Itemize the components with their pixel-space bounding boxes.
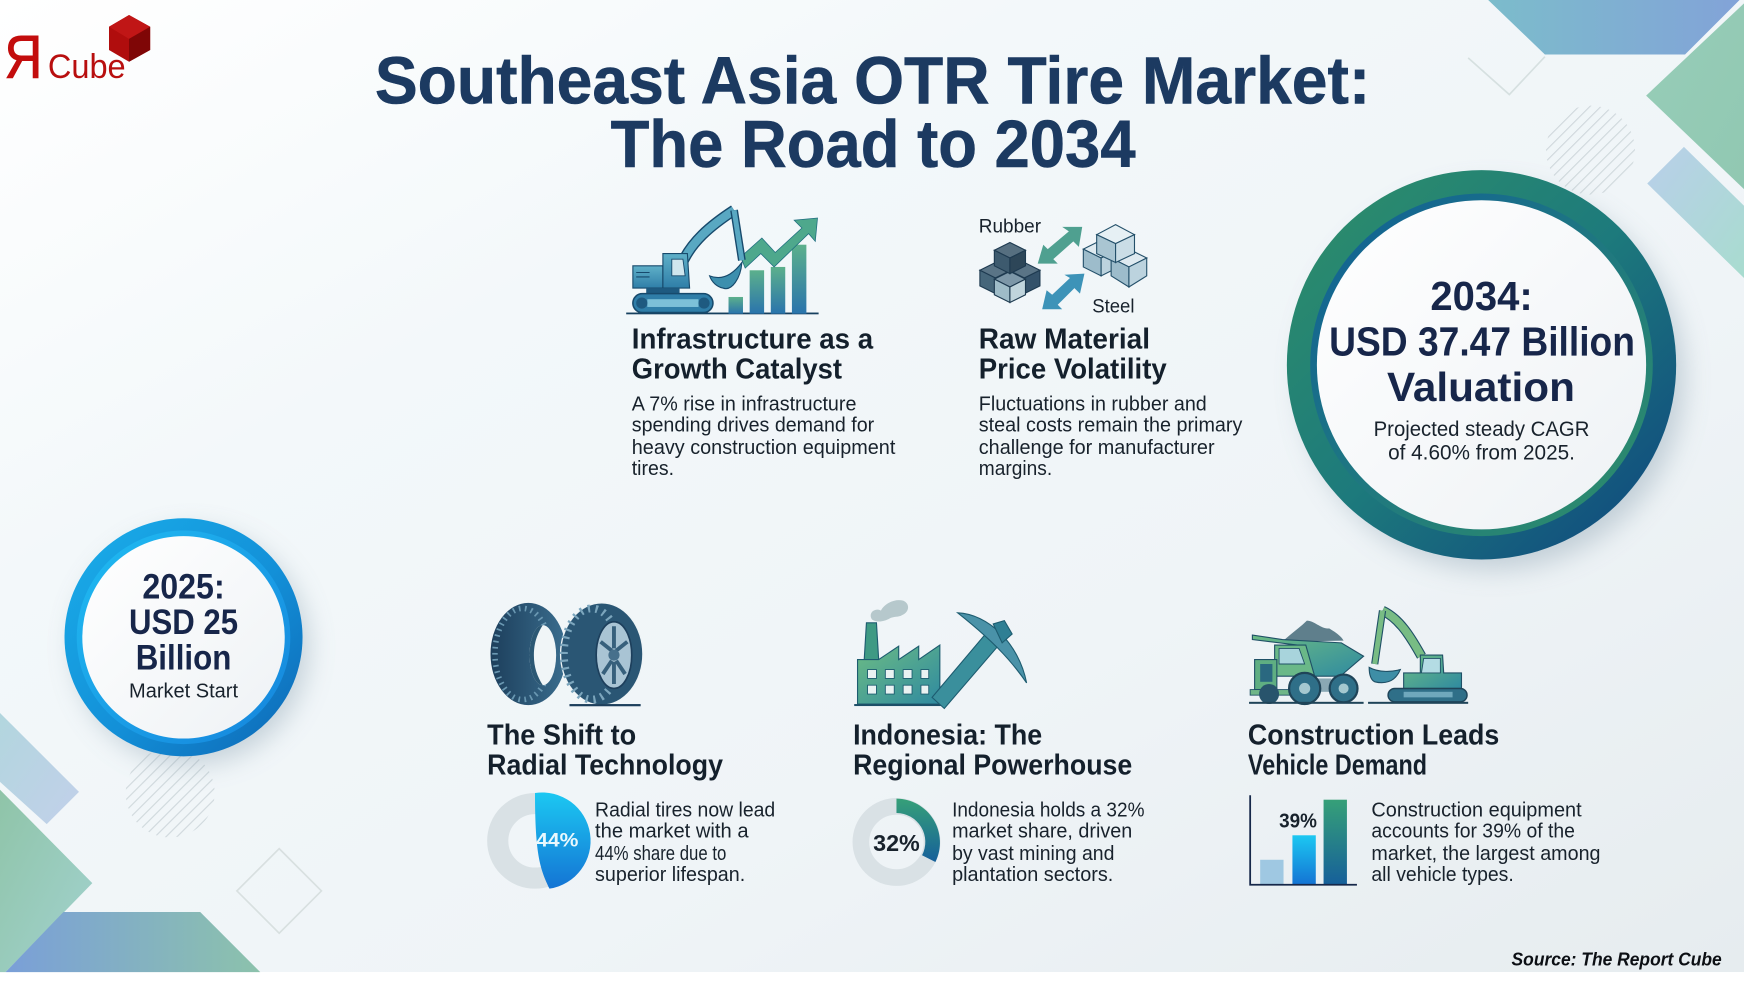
callout: 2034 valuation [1287,170,1684,569]
logo: Cube [48,48,126,86]
body text [952,798,1144,886]
callout: 2034 valuation: Projected steady CAGR [1374,416,1589,441]
title [375,44,1370,182]
body text: superior lifespan. [595,863,745,886]
title: Southeast Asia OTR Tire Market: [375,44,1370,118]
panel: infrastructure [626,210,896,480]
heading: Construction Leads [1248,720,1499,752]
callout: 2025 market start: USD 25 [129,602,238,642]
heading [632,324,874,386]
heading [853,720,1132,782]
icon: excavator and growth chart [626,210,819,314]
heading: Radial Technology [487,750,723,782]
body text [595,798,775,886]
icon: rubber and steel exchange: Rubber [979,215,1042,237]
body text: by vast mining and [952,842,1114,865]
logo [4,15,150,91]
body text: margins. [979,457,1052,480]
callout: 2034 valuation: Valuation [1387,364,1575,410]
body text: accounts for 39% of the [1371,820,1575,843]
icon: factory and pickaxe [854,600,1027,708]
body text: the market with a [595,820,749,843]
body text: heavy construction equipment [632,436,896,459]
heading: The Shift to [487,720,636,752]
callout: 2025 market start: Billion [136,638,231,678]
donut chart: 44%: 44% [536,829,578,851]
body text: 44% share due to [595,842,726,865]
icon: dump truck and excavator [1249,611,1468,704]
body text: all vehicle types. [1371,863,1514,886]
callout: 2034 valuation: 2034: [1430,273,1533,319]
panel: raw material [979,215,1243,480]
heading: Price Volatility [979,354,1167,386]
body text: spending drives demand for [632,414,874,437]
callout: 2025 market start [65,518,308,764]
body text: Indonesia holds a 32% [952,798,1144,821]
title: The Road to 2034 [611,108,1136,182]
donut chart: 32% [861,799,940,878]
body text: tires. [632,457,674,480]
body text: plantation sectors. [952,863,1113,886]
body text: steal costs remain the primary [979,414,1243,437]
heading: Indonesia: The [853,720,1042,752]
bar chart: 39%: 39% [1279,810,1317,833]
body text [632,392,896,480]
callout: 2025 market start: Market Start [129,679,238,702]
icon: rubber and steel exchange: Steel [1092,296,1134,318]
icon: rubber and steel exchange [979,215,1147,318]
panel: Indonesia [853,600,1144,886]
body text: market, the largest among [1371,842,1601,865]
heading: Raw Material [979,324,1150,356]
body text: challenge for manufacturer [979,436,1215,459]
body text: Radial tires now lead [595,798,775,821]
callout: 2034 valuation: USD 37.47 Billion [1329,318,1635,364]
callout: 2025 market start: 2025: [142,566,225,606]
donut chart: 44% [498,792,591,889]
heading: Infrastructure as a [632,324,874,356]
bar chart: 39% [1250,795,1357,885]
icon: two tires [491,603,643,706]
heading: Growth Catalyst [632,354,842,386]
heading: Regional Powerhouse [853,750,1132,782]
body text [1371,798,1601,886]
body text: Fluctuations in rubber and [979,392,1207,415]
donut chart: 32%: 32% [873,830,920,856]
heading [487,720,723,782]
callout: 2034 valuation: of 4.60% from 2025. [1388,439,1575,464]
heading [979,324,1167,386]
body text: Construction equipment [1371,798,1582,821]
source note: Source: The Report Cube [1512,948,1722,969]
logo: Я [4,24,42,91]
heading: Vehicle Demand [1248,750,1427,782]
panel: radial technology [487,603,775,889]
body text: market share, driven [952,820,1132,843]
body text: A 7% rise in infrastructure [632,392,856,415]
heading [1248,720,1499,782]
body text [979,392,1243,480]
panel: construction [1248,611,1601,886]
